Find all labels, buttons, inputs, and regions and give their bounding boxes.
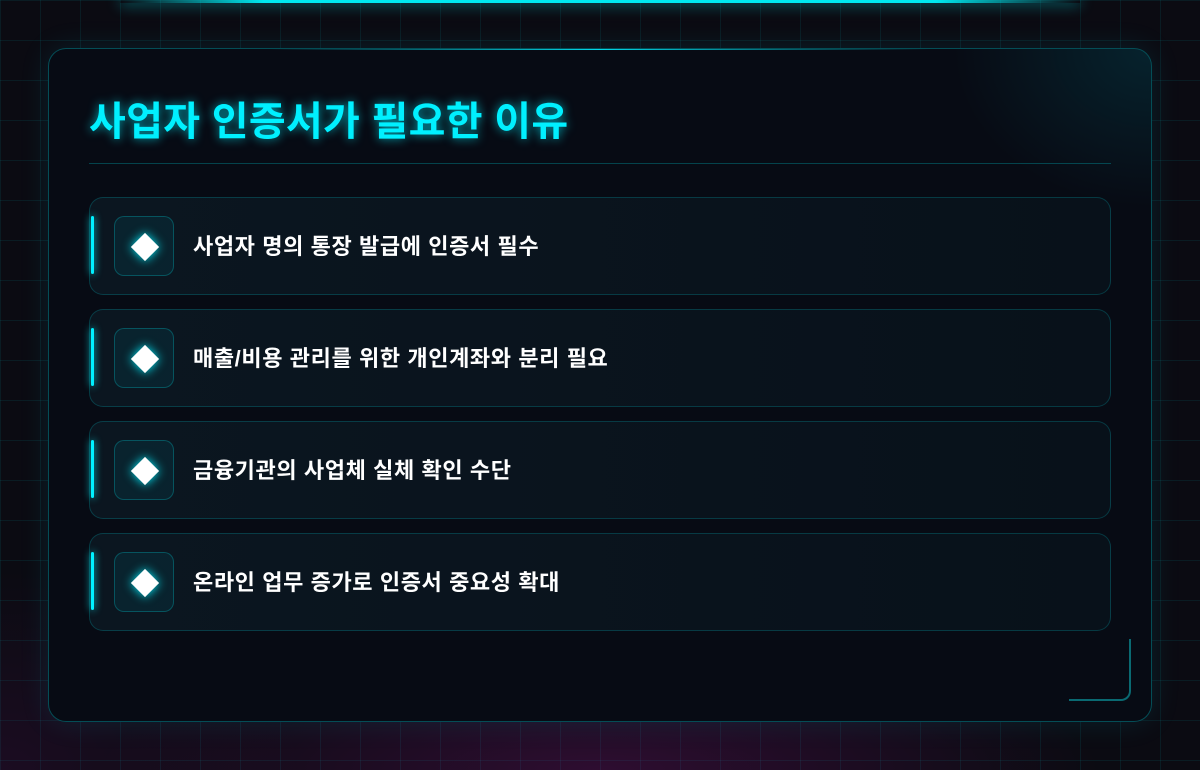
icon: diamond: [114, 552, 174, 612]
item 4: [89, 533, 1111, 631]
icon: diamond: [114, 440, 174, 500]
title: 사업자 인증서가 필요한 이유: [89, 100, 568, 144]
text: 사업자 명의 통장 발급에 인증서 필수: [193, 234, 539, 259]
text: 매출/비용 관리를 위한 개인계좌와 분리 필요: [193, 346, 608, 371]
icon: diamond: [114, 216, 174, 276]
corner bracket: [1069, 639, 1131, 701]
item 3: [89, 421, 1111, 519]
item 1: [89, 197, 1111, 295]
item 2: [89, 309, 1111, 407]
icon: diamond: [114, 328, 174, 388]
text: 금융기관의 사업체 실체 확인 수단: [193, 458, 512, 483]
text: 온라인 업무 증가로 인증서 중요성 확대: [193, 570, 560, 595]
